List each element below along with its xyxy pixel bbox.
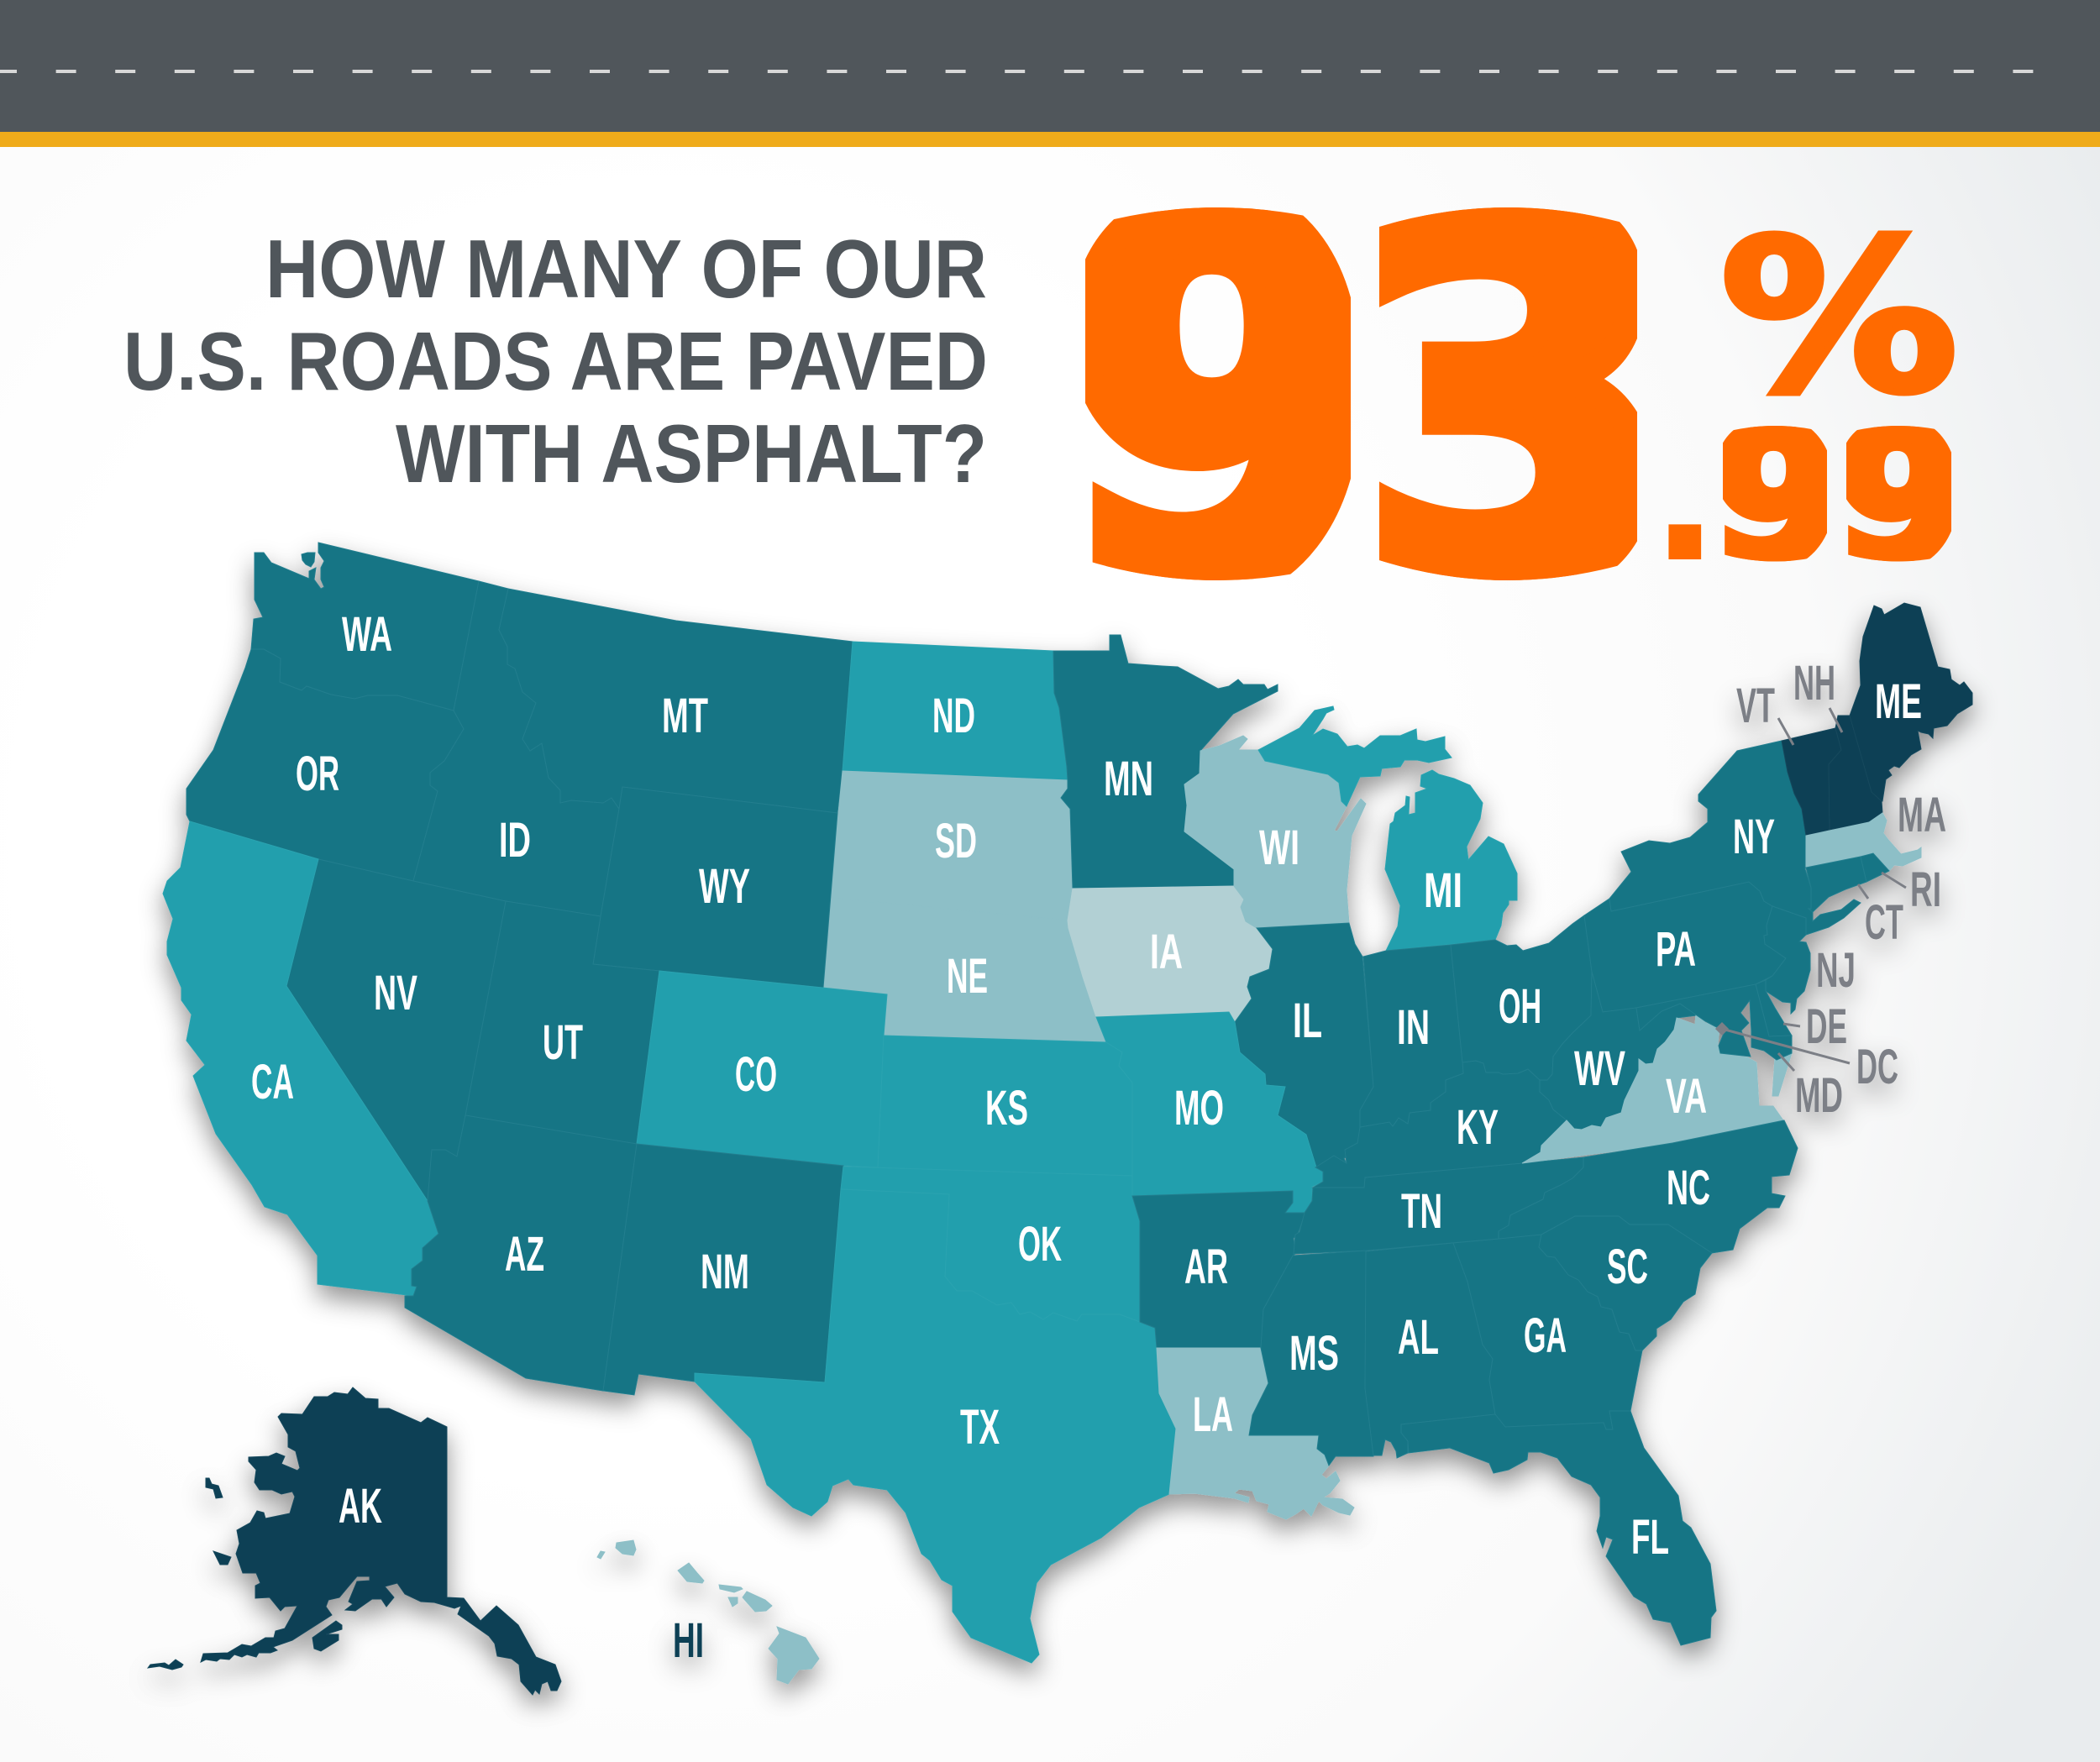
state: Oklahoma xyxy=(841,1167,1140,1322)
state: Colorado xyxy=(637,971,887,1167)
state: Ohio xyxy=(1451,915,1592,1080)
state: South Dakota: SD xyxy=(935,814,977,868)
map of U.S. states xyxy=(148,543,1972,1695)
state: Louisiana xyxy=(1157,1348,1354,1519)
state: Illinois xyxy=(1235,923,1373,1170)
state: Delaware: DE xyxy=(1806,999,1847,1054)
state: Pennsylvania xyxy=(1584,882,1786,1012)
district: Washington DC: DC xyxy=(1856,1040,1898,1094)
state: Mississippi xyxy=(1249,1251,1373,1466)
state: Wyoming: WY xyxy=(699,859,750,914)
state: New Jersey: NJ xyxy=(1816,943,1856,998)
state: Texas: TX xyxy=(960,1400,1000,1455)
state: South Carolina xyxy=(1539,1216,1712,1350)
state: Pennsylvania: PA xyxy=(1656,922,1696,977)
district: Washington DC xyxy=(1715,1022,1898,1094)
state: California: CA xyxy=(251,1055,294,1109)
state: Mississippi: MS xyxy=(1289,1326,1339,1381)
big statistic: 93.99%: . xyxy=(1650,388,1720,603)
state: Connecticut xyxy=(1806,857,1903,950)
state: Florida: FL xyxy=(1631,1510,1669,1565)
state: Maine xyxy=(1850,603,1972,801)
state: New Mexico: NM xyxy=(701,1245,749,1299)
state: Oregon: OR xyxy=(296,747,339,801)
state: Rhode Island: RI xyxy=(1910,863,1941,917)
state: Nevada xyxy=(286,859,506,1201)
state: Connecticut: CT xyxy=(1865,895,1903,950)
state: Tennessee xyxy=(1294,1157,1583,1254)
heading: HOW MANY OF OUR xyxy=(265,223,987,315)
state: Nevada: NV xyxy=(374,966,417,1020)
state: Missouri: MO xyxy=(1174,1081,1224,1135)
state: Virginia: VA xyxy=(1666,1069,1707,1124)
state: New York xyxy=(1609,741,1861,935)
state: Montana: MT xyxy=(662,689,708,743)
state: Utah: UT xyxy=(543,1015,583,1070)
state: Wisconsin xyxy=(1184,736,1366,928)
big statistic: 93.99%: 9 xyxy=(1060,101,1378,707)
state: Arkansas xyxy=(1132,1191,1305,1348)
state: Kentucky xyxy=(1313,1061,1567,1188)
state: Nebraska xyxy=(823,898,1106,1042)
state: New Mexico xyxy=(603,1144,843,1395)
road banner xyxy=(0,0,2100,147)
state: Oregon xyxy=(186,649,464,881)
state: Indiana: IN xyxy=(1397,1000,1430,1055)
state: Minnesota xyxy=(1053,635,1278,889)
big statistic: 93.99%: 9 xyxy=(1712,387,1840,608)
state: Washington xyxy=(251,543,479,711)
state: Maryland xyxy=(1636,984,1843,1123)
state: Maine: ME xyxy=(1875,674,1922,729)
state: Florida xyxy=(1401,1411,1716,1645)
state: Idaho xyxy=(413,581,619,916)
state: Nebraska: NE xyxy=(947,949,988,1004)
state: Georgia xyxy=(1453,1235,1642,1429)
big statistic: 93.99% xyxy=(1060,101,1964,707)
state: Massachusetts xyxy=(1806,788,1946,871)
state: West Virginia: WV xyxy=(1574,1041,1625,1096)
state: Montana xyxy=(499,589,853,813)
state: North Dakota xyxy=(843,642,1068,780)
state: Virginia xyxy=(1522,1015,1792,1163)
state: West Virginia xyxy=(1540,972,1697,1130)
heading: WITH ASPHALT? xyxy=(396,407,987,500)
state: Wisconsin: WI xyxy=(1259,821,1299,875)
state: New York: NY xyxy=(1733,810,1775,864)
state: Kentucky: KY xyxy=(1457,1100,1499,1155)
state: Minnesota: MN xyxy=(1104,752,1153,806)
state: Arkansas: AR xyxy=(1184,1240,1228,1294)
state: Maryland: MD xyxy=(1795,1068,1843,1123)
state: Texas xyxy=(695,1189,1176,1663)
state: South Dakota xyxy=(830,771,1072,920)
state: Tennessee: TN xyxy=(1401,1184,1442,1239)
big statistic: 93.99%: % xyxy=(1720,195,1958,439)
state: California xyxy=(163,821,438,1296)
state: Hawaii xyxy=(597,1540,819,1684)
state: North Carolina: NC xyxy=(1667,1161,1710,1215)
state: Alabama: AL xyxy=(1398,1310,1439,1365)
heading xyxy=(123,223,988,500)
state: Massachusetts: MA xyxy=(1898,788,1946,842)
state: Alabama xyxy=(1365,1243,1495,1458)
state: Arizona xyxy=(405,1115,637,1391)
state: Kansas xyxy=(878,1036,1132,1176)
state: Colorado: CO xyxy=(735,1047,777,1102)
state: Georgia: GA xyxy=(1524,1308,1567,1363)
state: Illinois: IL xyxy=(1293,994,1322,1048)
state: South Carolina: SC xyxy=(1607,1240,1648,1294)
state: Arizona: AZ xyxy=(505,1227,544,1282)
state: Rhode Island xyxy=(1861,853,1941,917)
state: Missouri xyxy=(1096,1012,1323,1213)
state: Iowa xyxy=(1068,886,1273,1022)
state: Utah xyxy=(465,901,659,1144)
big statistic: 93.99%: 3 xyxy=(1344,101,1677,707)
state: Ohio: OH xyxy=(1499,979,1541,1034)
state: Kansas: KS xyxy=(985,1081,1028,1135)
state: Iowa: IA xyxy=(1150,925,1183,979)
state: Oklahoma: OK xyxy=(1018,1217,1062,1272)
state: North Carolina xyxy=(1499,1120,1798,1253)
state: North Dakota: ND xyxy=(932,689,975,743)
state: Louisiana: LA xyxy=(1193,1387,1233,1442)
state: Idaho: ID xyxy=(499,813,531,868)
state: Michigan: MI xyxy=(1424,863,1462,918)
state: Alaska: AK xyxy=(339,1479,382,1534)
state: Vermont: VT xyxy=(1736,679,1775,733)
state: Delaware xyxy=(1756,980,1847,1054)
state: Vermont xyxy=(1736,679,1841,836)
state: Michigan xyxy=(1258,706,1517,951)
heading: U.S. ROADS ARE PAVED xyxy=(123,315,988,407)
state: Wyoming xyxy=(593,787,837,988)
state: Alaska xyxy=(148,1387,561,1695)
state: New Hampshire xyxy=(1793,656,1882,830)
state: Indiana xyxy=(1360,945,1463,1127)
state: Hawaii: HI xyxy=(673,1613,704,1668)
big statistic: 93.99%: 9 xyxy=(1835,387,1964,608)
state: New Hampshire: NH xyxy=(1793,656,1835,711)
state: New Jersey xyxy=(1764,906,1856,1014)
state: Washington: WA xyxy=(342,607,392,662)
